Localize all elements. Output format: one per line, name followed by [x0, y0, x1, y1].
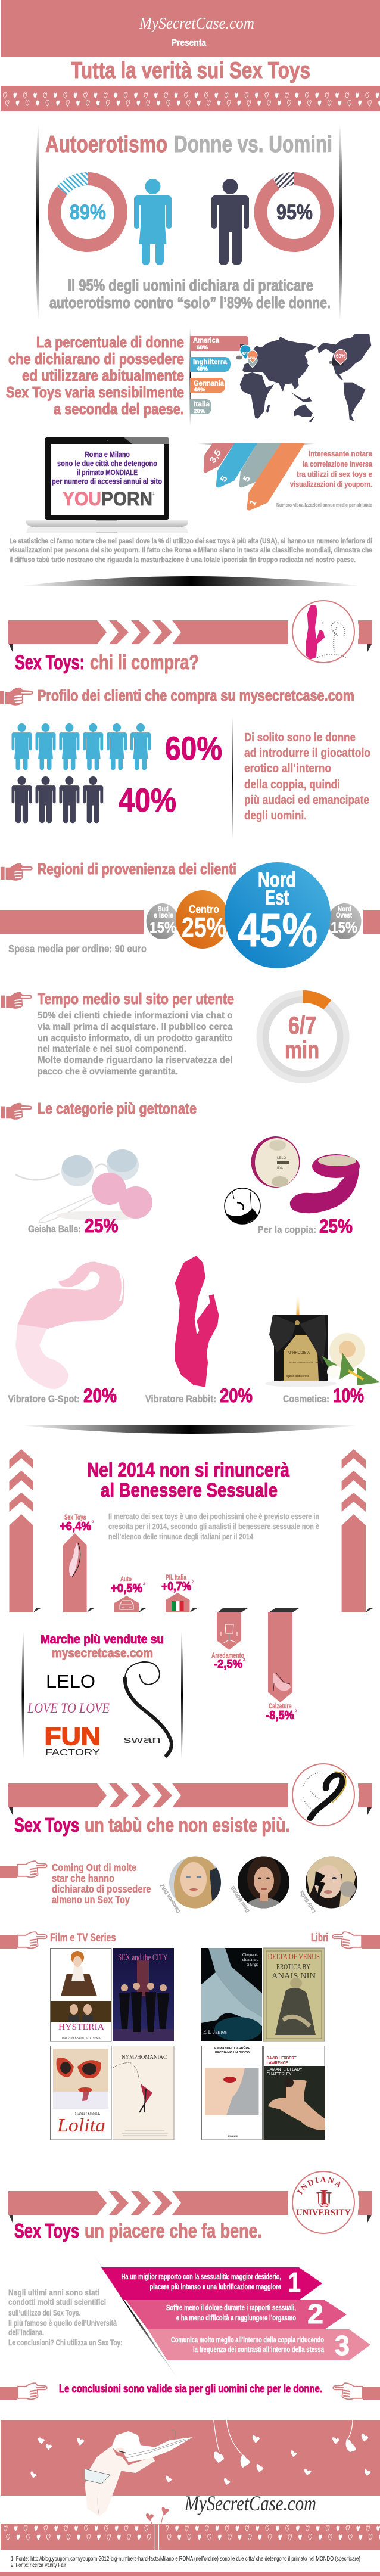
text: tempo medio paragraph: pacco che è ovviamente garantita. — [38, 1067, 178, 1077]
footer illustration — [30, 2420, 370, 2550]
title: Tutta la verità sui Sex Toys — [71, 58, 310, 83]
text: mercato sex toys: crescita per il 2014, secondo gli analisti il benessere sessuale non è — [108, 1522, 319, 1531]
bar: america — [190, 336, 248, 351]
ribbon: 5 b — [239, 443, 281, 487]
text: tempo medio paragraph: un acquisto informato, di un prodotto garantito — [38, 1033, 232, 1043]
chart: regioni bubbles — [0, 862, 380, 968]
bubble: nord ovest: Nord — [338, 905, 351, 913]
label: cosmetica 10%: 10% — [333, 1385, 364, 1406]
ribbon 3: comunica meglio — [148, 2329, 370, 2361]
poster: nymphomaniac: NYMPHOMANIAC — [122, 2055, 167, 2061]
panel: marche più vendute — [21, 1630, 183, 1761]
text: 95% vs 89%: Il 95% degli uomini dichiara di praticare — [68, 276, 313, 294]
stat: 40%: 40% — [119, 781, 176, 819]
heading: libri: Libri — [311, 1932, 328, 1944]
poster: lolita: Lolita — [57, 2114, 105, 2136]
ribbon 3: comunica meglio: 3 — [335, 2330, 350, 2361]
heading — [45, 132, 332, 157]
poster: cinquanta sfumature di grigio — [201, 1948, 262, 2041]
bar: sex toys +6,4% — [60, 1514, 94, 1612]
label: per la coppia 25% — [257, 1216, 353, 1237]
heading: Autoerotismo — [45, 132, 167, 157]
bar: italia — [190, 399, 211, 415]
pin: inghilterra: 49% — [242, 352, 250, 356]
bar: calzature -8,5%: 2 — [295, 1710, 297, 1713]
label: rabbit 20%: 20% — [220, 1385, 253, 1406]
ribbon 1: miglior rapporto: 1 — [288, 2267, 301, 2298]
icon: black vibrator — [303, 1772, 345, 1819]
bubble: nord ovest: Ovest — [336, 911, 352, 919]
product: vibratore g-spot — [8, 1262, 123, 1406]
product: per la coppia: LELO — [277, 1157, 286, 1160]
bar: arredamento -2,5%: 2 — [243, 1658, 245, 1662]
diagonal shadow — [92, 2252, 180, 2382]
pin: america: 60% — [336, 353, 345, 359]
coming out block: almeno un Sex Toy — [52, 1894, 130, 1906]
pictogram: 40% uomini — [12, 776, 103, 823]
poster: l'amante di lady chatterley: CHATTERLEY — [267, 2072, 292, 2077]
bar: germania: 46% — [194, 387, 206, 393]
poster: nymphomaniac — [113, 2046, 174, 2140]
ribbon 2: meno dolore — [126, 2298, 347, 2329]
text: studi scientifici: Negli ultimi anni sono stati — [8, 2288, 99, 2297]
woman figure — [85, 2430, 192, 2516]
ribbon 2: meno dolore: Soffre meno il dolore durante i rapporti sessuali, — [166, 2303, 296, 2312]
heading: regioni — [1, 860, 236, 881]
heading: film e tv series: Film e TV Series — [50, 1932, 116, 1944]
poster: delta of venus — [263, 1948, 325, 2041]
logo: swan — [123, 1662, 172, 1757]
hearts scattered — [30, 2434, 370, 2485]
bubble: centro — [176, 890, 229, 949]
donut chart: uomini 95% — [261, 172, 328, 246]
poster: hysteria — [50, 1949, 111, 2041]
text: studi scientifici — [8, 2288, 123, 2347]
poster: delta of venus: ANAÏS NIN — [272, 1971, 316, 1981]
pin: inghilterra — [240, 345, 251, 359]
text: tempo medio paragraph: 50% dei clienti chiede informazioni via chat o — [38, 1011, 232, 1021]
stat: 60%: 60% — [165, 729, 222, 767]
text: percentuale di donne — [6, 333, 184, 418]
arrows: right column up — [342, 1449, 373, 1612]
pictogram: 60% donne — [12, 723, 151, 770]
bar: pil italia +0,7%: 2 — [192, 1581, 194, 1584]
bubble: centro: Centro — [189, 903, 219, 915]
poster: facciamo un gioco: EINAUDI — [228, 2134, 238, 2137]
bar: calzature -8,5% — [266, 1608, 299, 1722]
bottom stripe — [0, 2572, 380, 2576]
label: per la coppia 25%: Per la coppia: — [257, 1224, 316, 1235]
product: cosmetica candle: APHRODISIA — [288, 1351, 310, 1355]
bar: calzature -8,5%: Calzature — [269, 1703, 292, 1710]
poster: lolita — [50, 2046, 111, 2140]
product: per la coppia: IDA — [277, 1167, 283, 1170]
logo: fun factory: FACTORY — [45, 1748, 100, 1758]
seal: indiana university — [296, 2176, 351, 2218]
map pins — [240, 345, 347, 368]
bubble: nord est: Est — [265, 886, 289, 909]
label: rabbit 20%: Vibratore Rabbit: — [145, 1393, 216, 1404]
ribbon 1: miglior rapporto: Ha un miglior rapporto con la sessualità: maggior desiderio, — [122, 2272, 281, 2281]
laptop text: il primato MONDIALE — [77, 468, 138, 477]
text: percentuale di donne: La percentuale di donne — [36, 333, 184, 351]
ribbon: 3,5 — [204, 443, 234, 473]
bar: germania — [190, 378, 225, 393]
photo: cameron diaz — [160, 1857, 221, 1913]
section ribbon: tabù — [8, 1762, 372, 1828]
bar: germania: Germania — [194, 379, 224, 387]
heading: categorie — [1, 1099, 197, 1120]
photo: lady gaga — [298, 1855, 359, 1914]
text: di solito sono le donne: erotico all’interno — [244, 762, 331, 775]
bar: inghilterra: Inghilterra — [193, 358, 227, 366]
text: spesa media: Spesa media per ordine: 90 euro — [8, 943, 147, 955]
youporn logo: YOU — [63, 488, 101, 509]
logo: mysecretcase dark: MySecretCase.com — [184, 2491, 316, 2515]
bar: sex toys +6,4%: Sex Toys — [64, 1514, 86, 1521]
poster: hysteria: DAL 21 FEBBRAIO AL CINEMA — [62, 2037, 101, 2040]
ribbon chart: visualizzazioni youporn — [196, 439, 373, 511]
ribbon 1: miglior rapporto — [101, 2267, 322, 2300]
text: di solito sono le donne: Di solito sono le donne — [244, 731, 356, 744]
presenta: Presenta — [172, 37, 206, 48]
panel: autoerotismo donne vs uomini — [36, 122, 342, 322]
poster: cinquanta sfumature di grigio: di Grigio — [247, 1962, 258, 1967]
heading: regioni: Regioni di provenienza dei clienti — [38, 860, 236, 878]
text: tempo medio paragraph: Molte domande riguardano la riservatezza del — [38, 1055, 232, 1065]
text: tempo medio paragraph: via mail prima di acquistare. Il pubblico cerca — [38, 1022, 233, 1032]
section heading: chi li compra: chi li compra? — [90, 651, 199, 674]
laptop text: per numero di accessi annui al sito — [52, 477, 162, 486]
product: geisha balls — [15, 1149, 152, 1236]
bar: italia: 28% — [194, 408, 206, 415]
section ribbon: chi li compra — [8, 599, 372, 664]
heading: libri — [311, 1932, 380, 1949]
text: studi scientifici: dell’Indiana. — [8, 2328, 44, 2337]
label: per la coppia 25%: 25% — [319, 1216, 353, 1237]
footnotes: 2. Fonte: ricerca Vanity Fair — [11, 2562, 66, 2569]
coming out block: star che hanno — [52, 1872, 114, 1884]
poster: l'amante di lady chatterley: DAVID HERBERT — [267, 2056, 297, 2061]
seal: indiana university: INDIANA — [297, 2176, 341, 2195]
bar: pil italia +0,7%: PIL Italia — [166, 1574, 186, 1581]
text: mercato sex toys: Il mercato dei sex toys è uno dei pochissimi che è previsto essere in — [108, 1512, 319, 1521]
donut chart: donne 89% — [54, 172, 121, 246]
laptop text: sono le due città che detengono — [57, 459, 157, 468]
laptop text — [52, 450, 162, 486]
bar: inghilterra: 49% — [197, 366, 208, 372]
youporn logo: 1 — [152, 492, 155, 496]
poster: l'amante di lady chatterley — [263, 2046, 325, 2140]
text: percentuale di donne: che dichiarano di possedere — [8, 350, 184, 368]
bar: auto +0,5% — [111, 1576, 146, 1612]
coming out block: Coming Out di molte — [52, 1862, 136, 1873]
youporn logo — [63, 488, 155, 509]
bubble: centro: 25% — [182, 912, 226, 943]
text: studi scientifici: sull’utilizzo dei Sex Toys. — [8, 2308, 81, 2317]
panel heading: Marche più vendute su — [41, 1633, 164, 1646]
text: studi scientifici: Il più famoso è quello dell’Università — [8, 2319, 117, 2328]
ribbon: 1 — [247, 443, 305, 511]
panel heading — [41, 1633, 164, 1660]
heading: film e tv series — [0, 1932, 116, 1949]
heading: Donne vs. Uomini — [174, 132, 332, 157]
caption: lady gaga: Lady GaGa — [298, 1890, 317, 1914]
ribbon 1: miglior rapporto: piacere più intenso e una lubrificazione maggiore — [150, 2282, 281, 2291]
text: studi scientifici: condotti molti studi scientifici — [8, 2298, 106, 2307]
poster: l'amante di lady chatterley: L'AMANTE DI LADY — [267, 2068, 303, 2072]
label: cosmetica 10%: Cosmetica: — [283, 1393, 329, 1404]
heading: benessere sessuale: Nel 2014 non si rinuncerà — [87, 1459, 290, 1481]
bubble: nord est: 45% — [238, 903, 317, 956]
product: per la coppia — [225, 1136, 360, 1237]
header band — [1, 0, 380, 57]
ribbon: 5 b: 5 — [241, 474, 253, 484]
heading: benessere sessuale: al Benessere Sessuale — [101, 1479, 278, 1501]
label: geisha balls 25%: 25% — [85, 1215, 119, 1236]
seal: indiana university: U — [316, 2187, 332, 2211]
bar: sex toys +6,4%: +6,4% — [60, 1520, 91, 1533]
heading: tempo medio — [1, 990, 234, 1009]
section heading: piacere che fa bene — [14, 2220, 262, 2242]
section heading: piacere che fa bene: Sex Toys — [14, 2220, 79, 2242]
ring gauge: 6/7 min: 6/7 — [288, 1011, 316, 1039]
text: studi scientifici: Le conclusioni? Chi utilizza un Sex Toy: — [8, 2338, 123, 2347]
ribbon 3: comunica meglio: Comunica molto meglio all’interno della coppia riducendo — [171, 2335, 324, 2344]
bar: sex toys +6,4%: 2 — [92, 1521, 94, 1524]
section heading: piacere che fa bene: un piacere che fa bene. — [85, 2220, 262, 2242]
poster: cinquanta sfumature di grigio: E L James — [203, 2029, 227, 2036]
poster: facciamo un gioco — [201, 2046, 262, 2140]
pin: germania — [248, 350, 257, 363]
text: percentuale di donne: Sex Toys varia sensibilmente — [6, 383, 184, 401]
heart stems — [149, 2512, 164, 2550]
arrows: left column up — [10, 1449, 41, 1612]
poster: cinquanta sfumature di grigio: sfumature — [242, 1957, 258, 1962]
text: mercato sex toys: nell’elenco delle rinunce degli italiani per il 2014 — [108, 1532, 254, 1541]
panel heading: mysecretcase.com — [52, 1646, 153, 1660]
bar: arredamento -2,5%: -2,5% — [214, 1658, 242, 1671]
bubble: nord ovest — [326, 902, 362, 940]
coming out block: dichiarato di possedere — [52, 1883, 151, 1895]
bubble: sud e isole: e Isole — [154, 911, 173, 919]
logo: love to love: LOVE TO LOVE — [27, 1701, 110, 1716]
bar: auto +0,5%: 2 — [143, 1583, 145, 1586]
section ribbon: indiana university — [8, 2171, 372, 2234]
text: percentuale di donne: a seconda del paese. — [54, 400, 184, 418]
logo: fun factory: FUN — [44, 1722, 101, 1750]
icon: man — [211, 179, 249, 265]
ribbon: 5 a — [216, 443, 257, 487]
label: geisha balls 25%: Geisha Balls: — [28, 1223, 81, 1235]
bar: calzature -8,5%: -8,5% — [266, 1709, 294, 1722]
hanging strings — [214, 2420, 353, 2455]
ribbon 2: meno dolore: e ha meno difficoltà a raggiungere l’orgasmo — [176, 2313, 296, 2322]
pin: america — [335, 349, 347, 365]
poster: l'amante di lady chatterley: LAWRENCE — [267, 2061, 288, 2065]
footnotes — [11, 2556, 360, 2569]
bubble: sud e isole — [145, 902, 180, 940]
ribbon: 3,5: 3,5 — [208, 448, 223, 465]
world map — [236, 334, 371, 422]
poster: lolita: STANLEY KUBRICK — [75, 2111, 100, 2116]
text: percentuale di donne: ed utilizzare abitualmente — [22, 366, 184, 384]
poster: facciamo un gioco: EMMANUEL CARRÈRE — [214, 2046, 251, 2050]
section heading: chi li compra: Sex Toys: — [15, 651, 85, 674]
text: 95% vs 89% — [49, 276, 331, 312]
caption: demi moore: Demi MOORE — [230, 1885, 251, 1913]
icon: rabbit vibrator — [306, 605, 347, 660]
ribbon 2: meno dolore: 2 — [307, 2298, 323, 2329]
bar: america: America — [193, 336, 219, 344]
label: cosmetica 10% — [283, 1385, 364, 1406]
label: geisha balls 25% — [28, 1215, 119, 1236]
bubble: sud e isole: Sud — [158, 905, 169, 913]
bubble: nord est — [225, 862, 331, 968]
ribbon text — [276, 449, 373, 508]
text: di solito sono le donne: della coppia, quindi — [244, 778, 340, 791]
bar: america: 60% — [197, 344, 208, 351]
label: rabbit 20% — [145, 1385, 253, 1406]
section heading: tabù — [14, 1814, 290, 1836]
poster: delta of venus: EROTICA BY — [276, 1963, 310, 1972]
logo: lelo: LELO — [46, 1671, 95, 1692]
ribbon: 1: 1 — [248, 498, 258, 507]
label: g-spot 20%: 20% — [83, 1385, 117, 1406]
donut chart: donne 89%: 89% — [70, 201, 106, 224]
ring gauge: 6/7 min — [260, 990, 347, 1080]
poster: hysteria: HYSTERIA — [58, 2022, 104, 2032]
text: tempo medio paragraph: nel materiale e nei suoi componenti. — [38, 1044, 186, 1054]
text: tempo medio paragraph — [38, 1011, 233, 1077]
product: vibratore rabbit — [145, 1256, 253, 1406]
conclusion row — [0, 2383, 380, 2400]
text: mercato sex toys — [108, 1512, 319, 1541]
ribbon text: tra utilizzi di sex toys e — [297, 470, 372, 478]
seal: indiana university: I — [320, 2185, 328, 2209]
heading: benessere sessuale — [87, 1459, 290, 1501]
poster: cinquanta sfumature di grigio: Cinquanta — [242, 1953, 259, 1957]
product: cosmetica candle: bijoux indiscrets — [286, 1375, 309, 1378]
section heading: chi li compra — [15, 651, 199, 674]
small illustration — [225, 1188, 260, 1224]
heart pattern band — [1, 86, 380, 111]
product: cosmetica candle: SCENTED MASSAGE CANDLE — [289, 1361, 324, 1364]
section heading: tabù: Sex Toys — [14, 1814, 79, 1836]
bar: pil italia +0,7%: +0,7% — [161, 1580, 191, 1593]
footer panel — [1, 2420, 380, 2550]
section heading: tabù: un tabù che non esiste più. — [85, 1814, 290, 1836]
poster: sex and the city: SEX and the CITY — [118, 1953, 168, 1963]
label: g-spot 20%: Vibratore G-Spot: — [8, 1393, 80, 1404]
bars by country — [190, 336, 248, 415]
bubble: sud e isole: 15% — [149, 919, 176, 936]
label: g-spot 20% — [8, 1385, 117, 1406]
youporn logo: PORN — [101, 488, 152, 509]
bar: arredamento -2,5% — [211, 1608, 248, 1671]
poster: delta of venus: DELTA OF VENUS — [268, 1953, 320, 1962]
bar: pil italia +0,7% — [161, 1574, 197, 1612]
heading: categorie: Le categorie più gettonate — [38, 1099, 197, 1117]
pin: germania: 46% — [249, 356, 256, 361]
text: statistiche — [10, 537, 372, 564]
ribbon: 5 a: 5 — [219, 474, 230, 484]
bubble: nord ovest: 15% — [331, 919, 357, 936]
text: di solito sono le donne: degli uomini. — [244, 809, 307, 822]
bar: auto +0,5%: Auto — [120, 1576, 132, 1583]
seal: indiana university: UNIVERSITY — [296, 2208, 351, 2218]
bar: arredamento -2,5%: Arredamento — [211, 1652, 244, 1660]
text: di solito sono le donne — [244, 731, 370, 822]
heading: tempo medio: Tempo medio sul sito per utente — [38, 990, 234, 1008]
product: cosmetica candle — [265, 1293, 380, 1406]
laptop: youporn — [26, 437, 188, 533]
icon: woman — [134, 179, 172, 265]
ring gauge: 6/7 min: min — [285, 1036, 319, 1064]
coming out block — [0, 1861, 151, 1906]
bar: italia: Italia — [194, 400, 210, 408]
logo: MySecretCase.com: MySecretCase.com — [139, 14, 254, 32]
ribbon text: Interessante notare — [309, 449, 372, 458]
bubble: nord est: Nord — [258, 868, 296, 891]
caption: cameron diaz: Cameron DIAZ — [158, 1882, 182, 1914]
laptop text: Roma e Milano — [85, 450, 130, 459]
bar: auto +0,5%: +0,5% — [111, 1582, 142, 1595]
poster: facciamo un gioco: FACCIAMO UN GIOCO — [215, 2051, 250, 2055]
bar: inghilterra — [190, 357, 231, 372]
donut chart: uomini 95%: 95% — [276, 201, 313, 224]
poster: sex and the city — [113, 1948, 174, 2041]
photo: demi moore — [231, 1857, 289, 1913]
logo: swan: swan — [123, 1734, 161, 1745]
pin: italia — [248, 356, 257, 368]
ribbon 3: comunica meglio: la frequenza dei contrasti all’interno della stessa — [193, 2345, 325, 2354]
